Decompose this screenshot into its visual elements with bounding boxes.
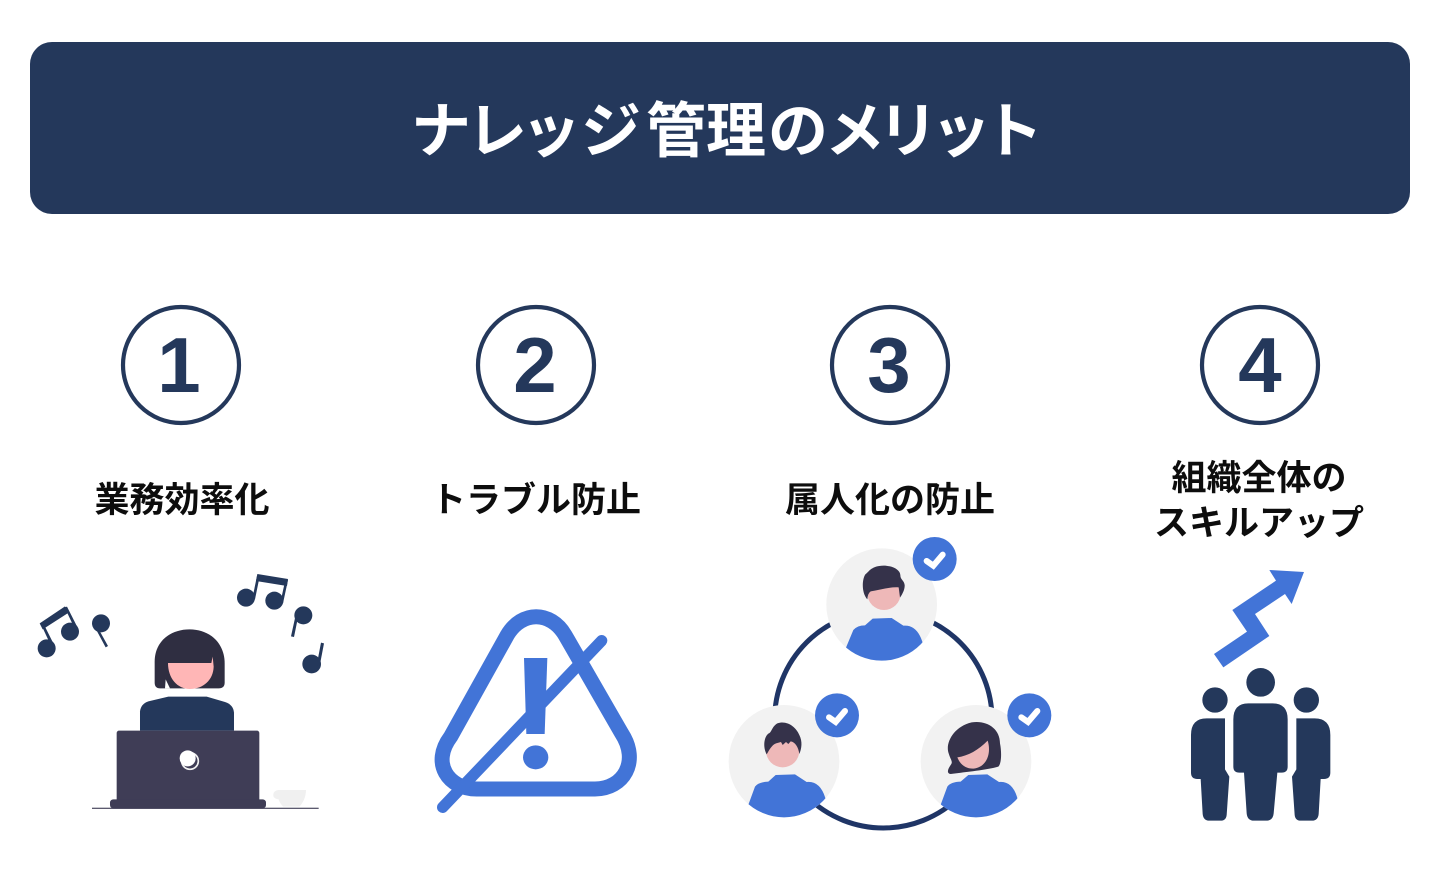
icon: woman with laptop and music notes	[38, 574, 324, 809]
number badge 4	[1202, 307, 1318, 423]
team silhouettes	[1191, 668, 1330, 821]
number badge 3	[832, 307, 948, 423]
slash	[443, 641, 602, 807]
number badge 2	[478, 307, 594, 423]
number badge 1	[123, 307, 239, 423]
label: 組織全体のスキルアップ: スキルアップ	[1154, 504, 1364, 543]
label: 属人化の防止: 属人化の防止	[785, 481, 995, 520]
number badge 3: 3	[867, 321, 911, 409]
check badges	[815, 537, 1051, 737]
person: top	[826, 548, 937, 663]
exclamation mark	[523, 658, 548, 769]
connecting ring	[775, 611, 992, 828]
laptop	[117, 731, 259, 802]
body	[140, 697, 234, 731]
music notes	[38, 574, 324, 673]
triangle outline	[442, 617, 629, 789]
icon: three connected people with checks	[729, 537, 1051, 828]
number badge 2: 2	[513, 321, 557, 409]
rising arrow	[1214, 570, 1304, 667]
label: 組織全体のスキルアップ: 組織全体の	[1171, 459, 1347, 498]
icon: warning triangle crossed out	[442, 617, 629, 807]
person: right	[921, 705, 1031, 820]
number badge 1: 1	[157, 321, 201, 409]
title banner: ナレッジ管理のメリット	[411, 98, 1043, 165]
desk line	[92, 808, 319, 809]
hair	[155, 629, 225, 688]
label: 業務効率化: 業務効率化	[94, 481, 270, 520]
label: トラブル防止: トラブル防止	[431, 480, 641, 520]
person: left	[729, 705, 839, 820]
face	[168, 657, 214, 689]
title banner	[30, 42, 1410, 214]
cup	[273, 790, 306, 807]
number badge 4: 4	[1238, 321, 1282, 409]
icon: team with rising arrow	[1191, 570, 1330, 821]
label: 組織全体のスキルアップ	[1154, 459, 1364, 543]
